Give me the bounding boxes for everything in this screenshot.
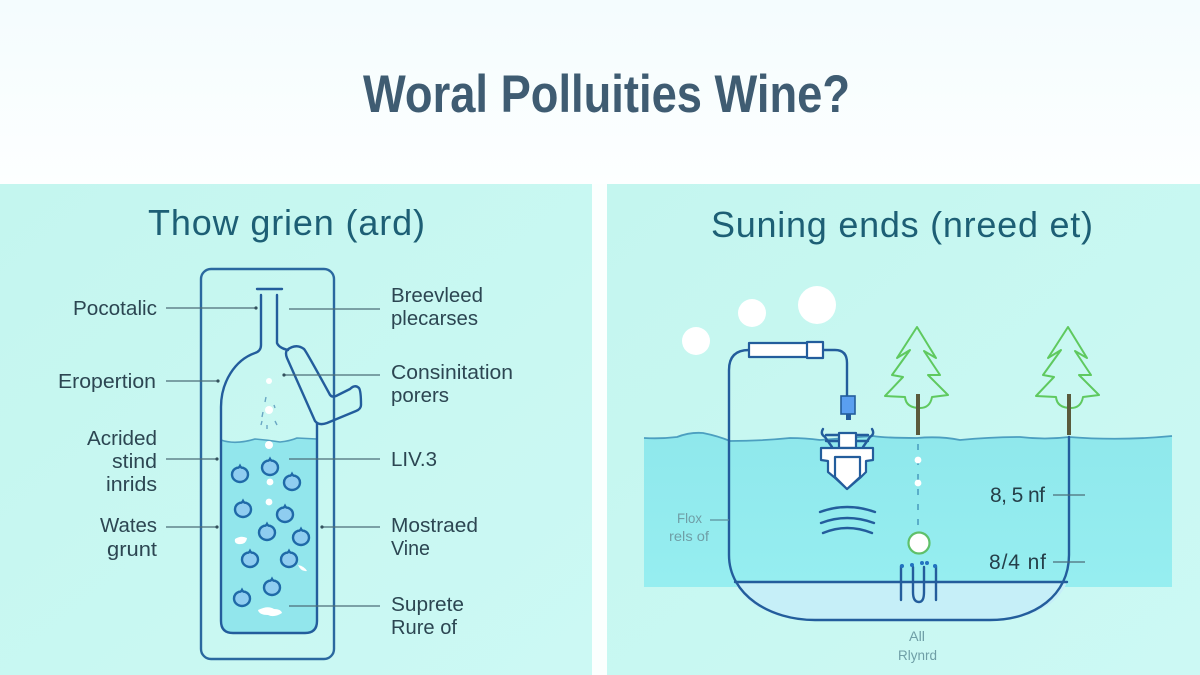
water band xyxy=(644,433,1172,587)
right labels: plecarses xyxy=(391,308,478,330)
bubbles xyxy=(682,286,836,355)
right labels: Vine xyxy=(391,538,430,560)
flow label: Flox xyxy=(677,511,702,526)
boat device xyxy=(821,429,873,489)
bottle with water xyxy=(221,289,361,633)
sensor ball xyxy=(908,532,930,554)
right labels: Rure of xyxy=(391,617,457,639)
left labels: Eropertion xyxy=(58,371,156,393)
left labels: stind xyxy=(112,451,157,473)
bottom probe xyxy=(900,561,937,602)
left labels: Acrided xyxy=(87,428,157,450)
right labels: Suprete xyxy=(391,594,464,616)
left labels: Pocotalic xyxy=(73,298,157,320)
sonar waves xyxy=(820,507,875,533)
tank basin xyxy=(729,350,1069,620)
left panel heading: Thow grien (ard) xyxy=(148,202,425,243)
right labels: porers xyxy=(391,385,449,407)
right labels: Breevleed xyxy=(391,285,483,307)
right labels: Mostraed xyxy=(391,515,478,537)
tree 2 xyxy=(1036,327,1099,435)
right labels xyxy=(391,285,513,639)
flow label: rels of xyxy=(669,529,709,544)
leader lines xyxy=(166,306,380,606)
bottom label: All xyxy=(909,629,925,644)
measurement labels: 8, 5 nf xyxy=(990,484,1045,507)
flow label xyxy=(669,511,729,544)
title: Woral Polluities Wine? xyxy=(363,65,850,124)
falling specks xyxy=(235,378,307,616)
handle xyxy=(286,346,361,424)
bottom label: Rlynrd xyxy=(898,648,937,663)
left labels xyxy=(58,298,157,561)
panel: right water scene xyxy=(607,184,1200,675)
pipe unit xyxy=(749,342,823,358)
measurement labels: 8/4 nf xyxy=(989,551,1046,574)
panel: left bottle diagram xyxy=(0,184,592,675)
left labels: Wates xyxy=(100,515,157,537)
right panel heading: Suning ends (nreed et) xyxy=(711,204,1093,245)
right labels: LIV.3 xyxy=(391,449,437,471)
dashed drip line xyxy=(915,444,921,532)
measurement labels xyxy=(989,484,1085,574)
tree 1 xyxy=(885,327,948,435)
left labels: inrids xyxy=(106,474,157,496)
droplets xyxy=(232,459,309,606)
right labels: Consinitation xyxy=(391,362,513,384)
bottom label xyxy=(898,629,937,663)
bottle case outline xyxy=(201,269,334,659)
left labels: grunt xyxy=(107,539,157,561)
nozzle xyxy=(841,396,855,420)
